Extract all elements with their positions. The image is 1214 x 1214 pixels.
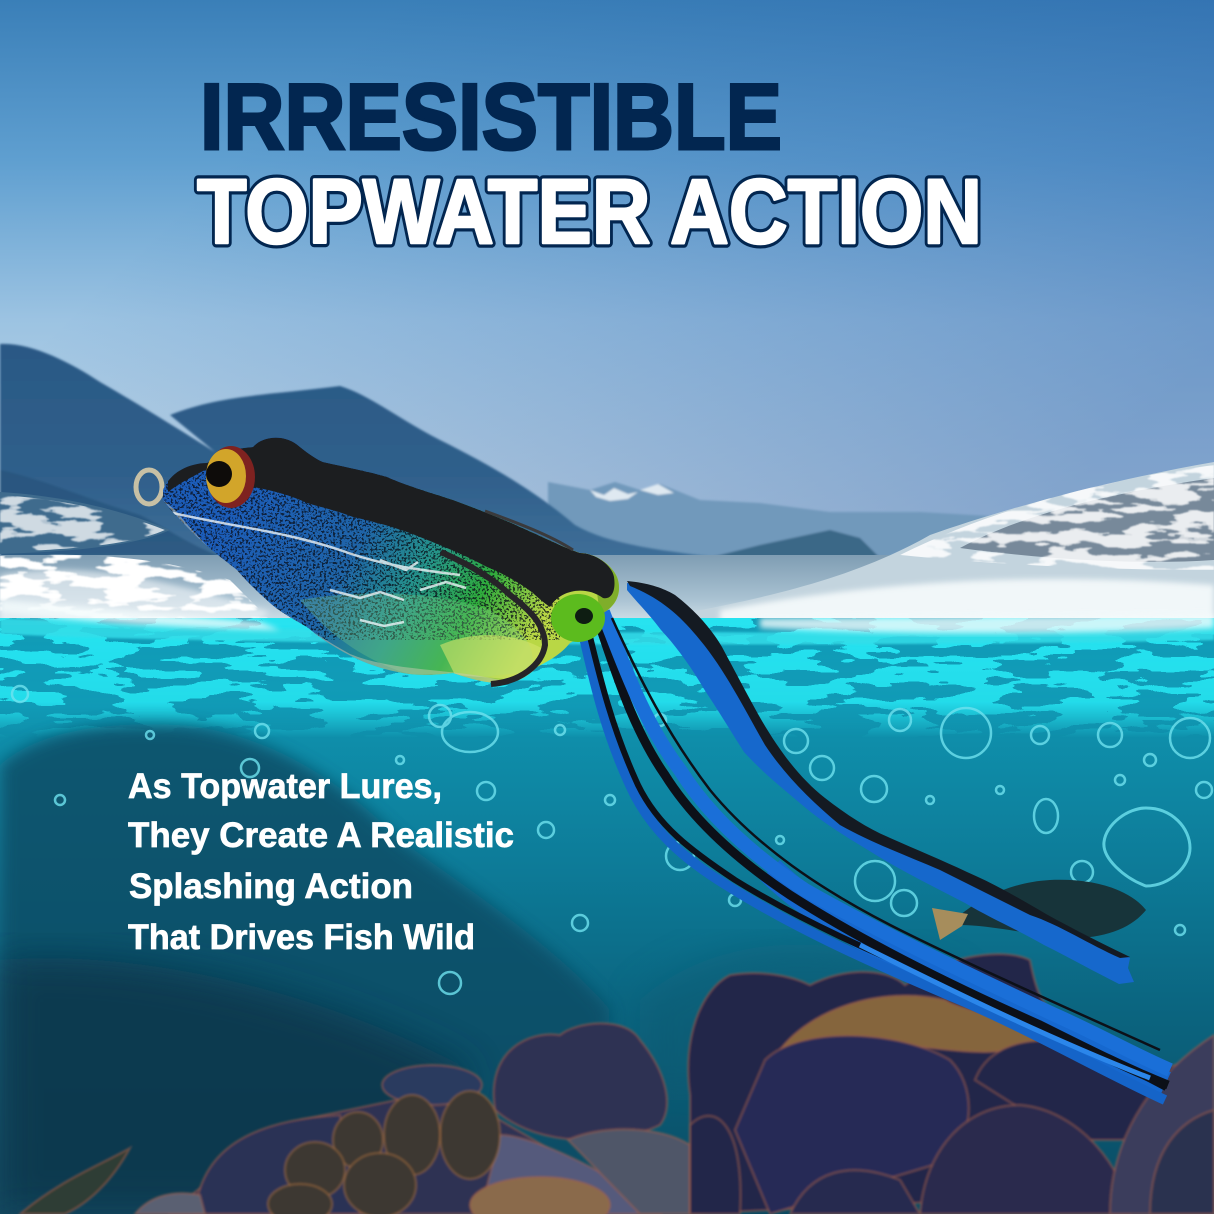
bubbles (12, 686, 1212, 994)
right wave (690, 462, 1214, 634)
eye (206, 446, 255, 508)
waterline caustics (0, 618, 1214, 738)
title (197, 64, 982, 263)
white foam at the waterline (0, 600, 1214, 633)
distant mountains (548, 482, 990, 560)
lake surface (0, 555, 1214, 635)
body text: They Create A Realistic (128, 816, 514, 855)
body text: That Drives Fish Wild (128, 918, 475, 957)
dark back (168, 438, 615, 607)
dark rock mass left (0, 724, 960, 1214)
hook eye (136, 470, 162, 504)
skirt: lower strands (578, 612, 1170, 1100)
left wave and splash (0, 492, 280, 632)
fish (932, 880, 1146, 940)
coral reef (20, 954, 1214, 1214)
upper hook (485, 511, 573, 550)
green tail rim (592, 555, 620, 612)
belly shine (300, 593, 533, 680)
sky background (0, 0, 1214, 640)
title line 2: TOPWATER ACTION (197, 161, 982, 263)
near mountains (0, 344, 720, 560)
title line 2: TOPWATER ACTION (197, 161, 982, 263)
green leg ring (551, 594, 605, 642)
body (163, 438, 619, 683)
speckles (160, 470, 560, 640)
underwater background (0, 625, 1214, 1214)
body text: As Topwater Lures, (128, 767, 442, 806)
body text (128, 767, 514, 957)
body text: Splashing Action (129, 867, 413, 906)
frog lure (136, 438, 1170, 1100)
hook (441, 552, 545, 684)
splash over body (160, 510, 466, 626)
title line 1: IRRESISTIBLE (200, 64, 782, 169)
skirt: upper bundle (627, 581, 1134, 984)
